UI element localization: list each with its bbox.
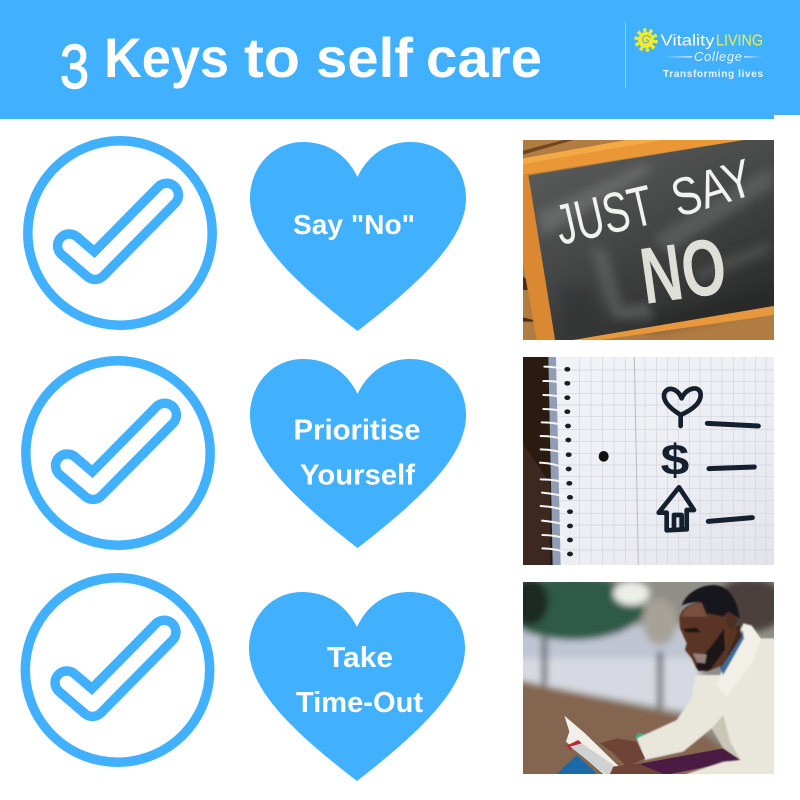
heart label xyxy=(294,414,420,492)
row 3: heart xyxy=(249,592,465,781)
heart label: Take xyxy=(327,642,393,674)
row 1: check icon xyxy=(28,141,212,325)
logo college: College xyxy=(694,49,742,64)
binding edge xyxy=(548,357,561,565)
row 1: photo of chalkboard: SAY xyxy=(665,149,760,229)
logo wordmark xyxy=(660,32,763,50)
row 2: heart xyxy=(250,359,466,548)
neck xyxy=(721,625,742,668)
logo wordmark: LIVING xyxy=(716,32,763,50)
dark background strip xyxy=(523,357,553,565)
spiral coils xyxy=(540,367,570,554)
hands xyxy=(600,738,645,767)
chalk writing: JUST xyxy=(549,174,659,258)
row 1: photo of chalkboard: NO xyxy=(635,221,732,321)
row 2: photo of notebook xyxy=(523,357,774,565)
title: care xyxy=(426,26,542,89)
drawn lines xyxy=(707,423,758,521)
man xyxy=(637,585,777,778)
notebook grid xyxy=(557,357,774,565)
blurred background xyxy=(523,582,774,774)
title: Keys xyxy=(104,26,229,89)
hair xyxy=(682,585,740,618)
punched hole xyxy=(599,451,609,462)
drawn heart xyxy=(664,388,701,426)
blue bag xyxy=(557,755,595,774)
title: self xyxy=(316,26,413,89)
heart label: Time-Out xyxy=(296,687,424,719)
title xyxy=(60,26,542,102)
purple trousers xyxy=(633,748,741,774)
chalkboard surface xyxy=(528,140,774,340)
face xyxy=(679,602,737,672)
logo tagline: Transforming lives xyxy=(663,69,763,80)
header banner xyxy=(0,0,800,119)
heart label: Say "No" xyxy=(293,209,415,240)
blue shirt collar xyxy=(720,630,744,675)
book xyxy=(564,716,618,774)
spiral holes xyxy=(564,367,573,556)
logo wordmark: Vitality xyxy=(660,32,715,50)
white sweater xyxy=(637,623,777,778)
heart label: Prioritise xyxy=(294,414,420,446)
orange frame xyxy=(523,140,774,340)
heart label xyxy=(296,642,424,719)
drawn dollar sign: $ xyxy=(661,437,689,485)
logo: Vitality Living College xyxy=(625,22,763,88)
row 2: check icon xyxy=(26,361,210,545)
row 3: photo of man reading xyxy=(523,582,774,774)
drawn house xyxy=(659,487,694,530)
heart label: Yourself xyxy=(300,460,416,492)
title: 3 xyxy=(60,33,89,102)
title: to xyxy=(244,26,300,89)
icon: sun xyxy=(637,31,655,49)
row 1: heart xyxy=(250,142,466,331)
row 3: check icon xyxy=(25,578,210,762)
row 1: photo of chalkboard xyxy=(523,140,774,340)
